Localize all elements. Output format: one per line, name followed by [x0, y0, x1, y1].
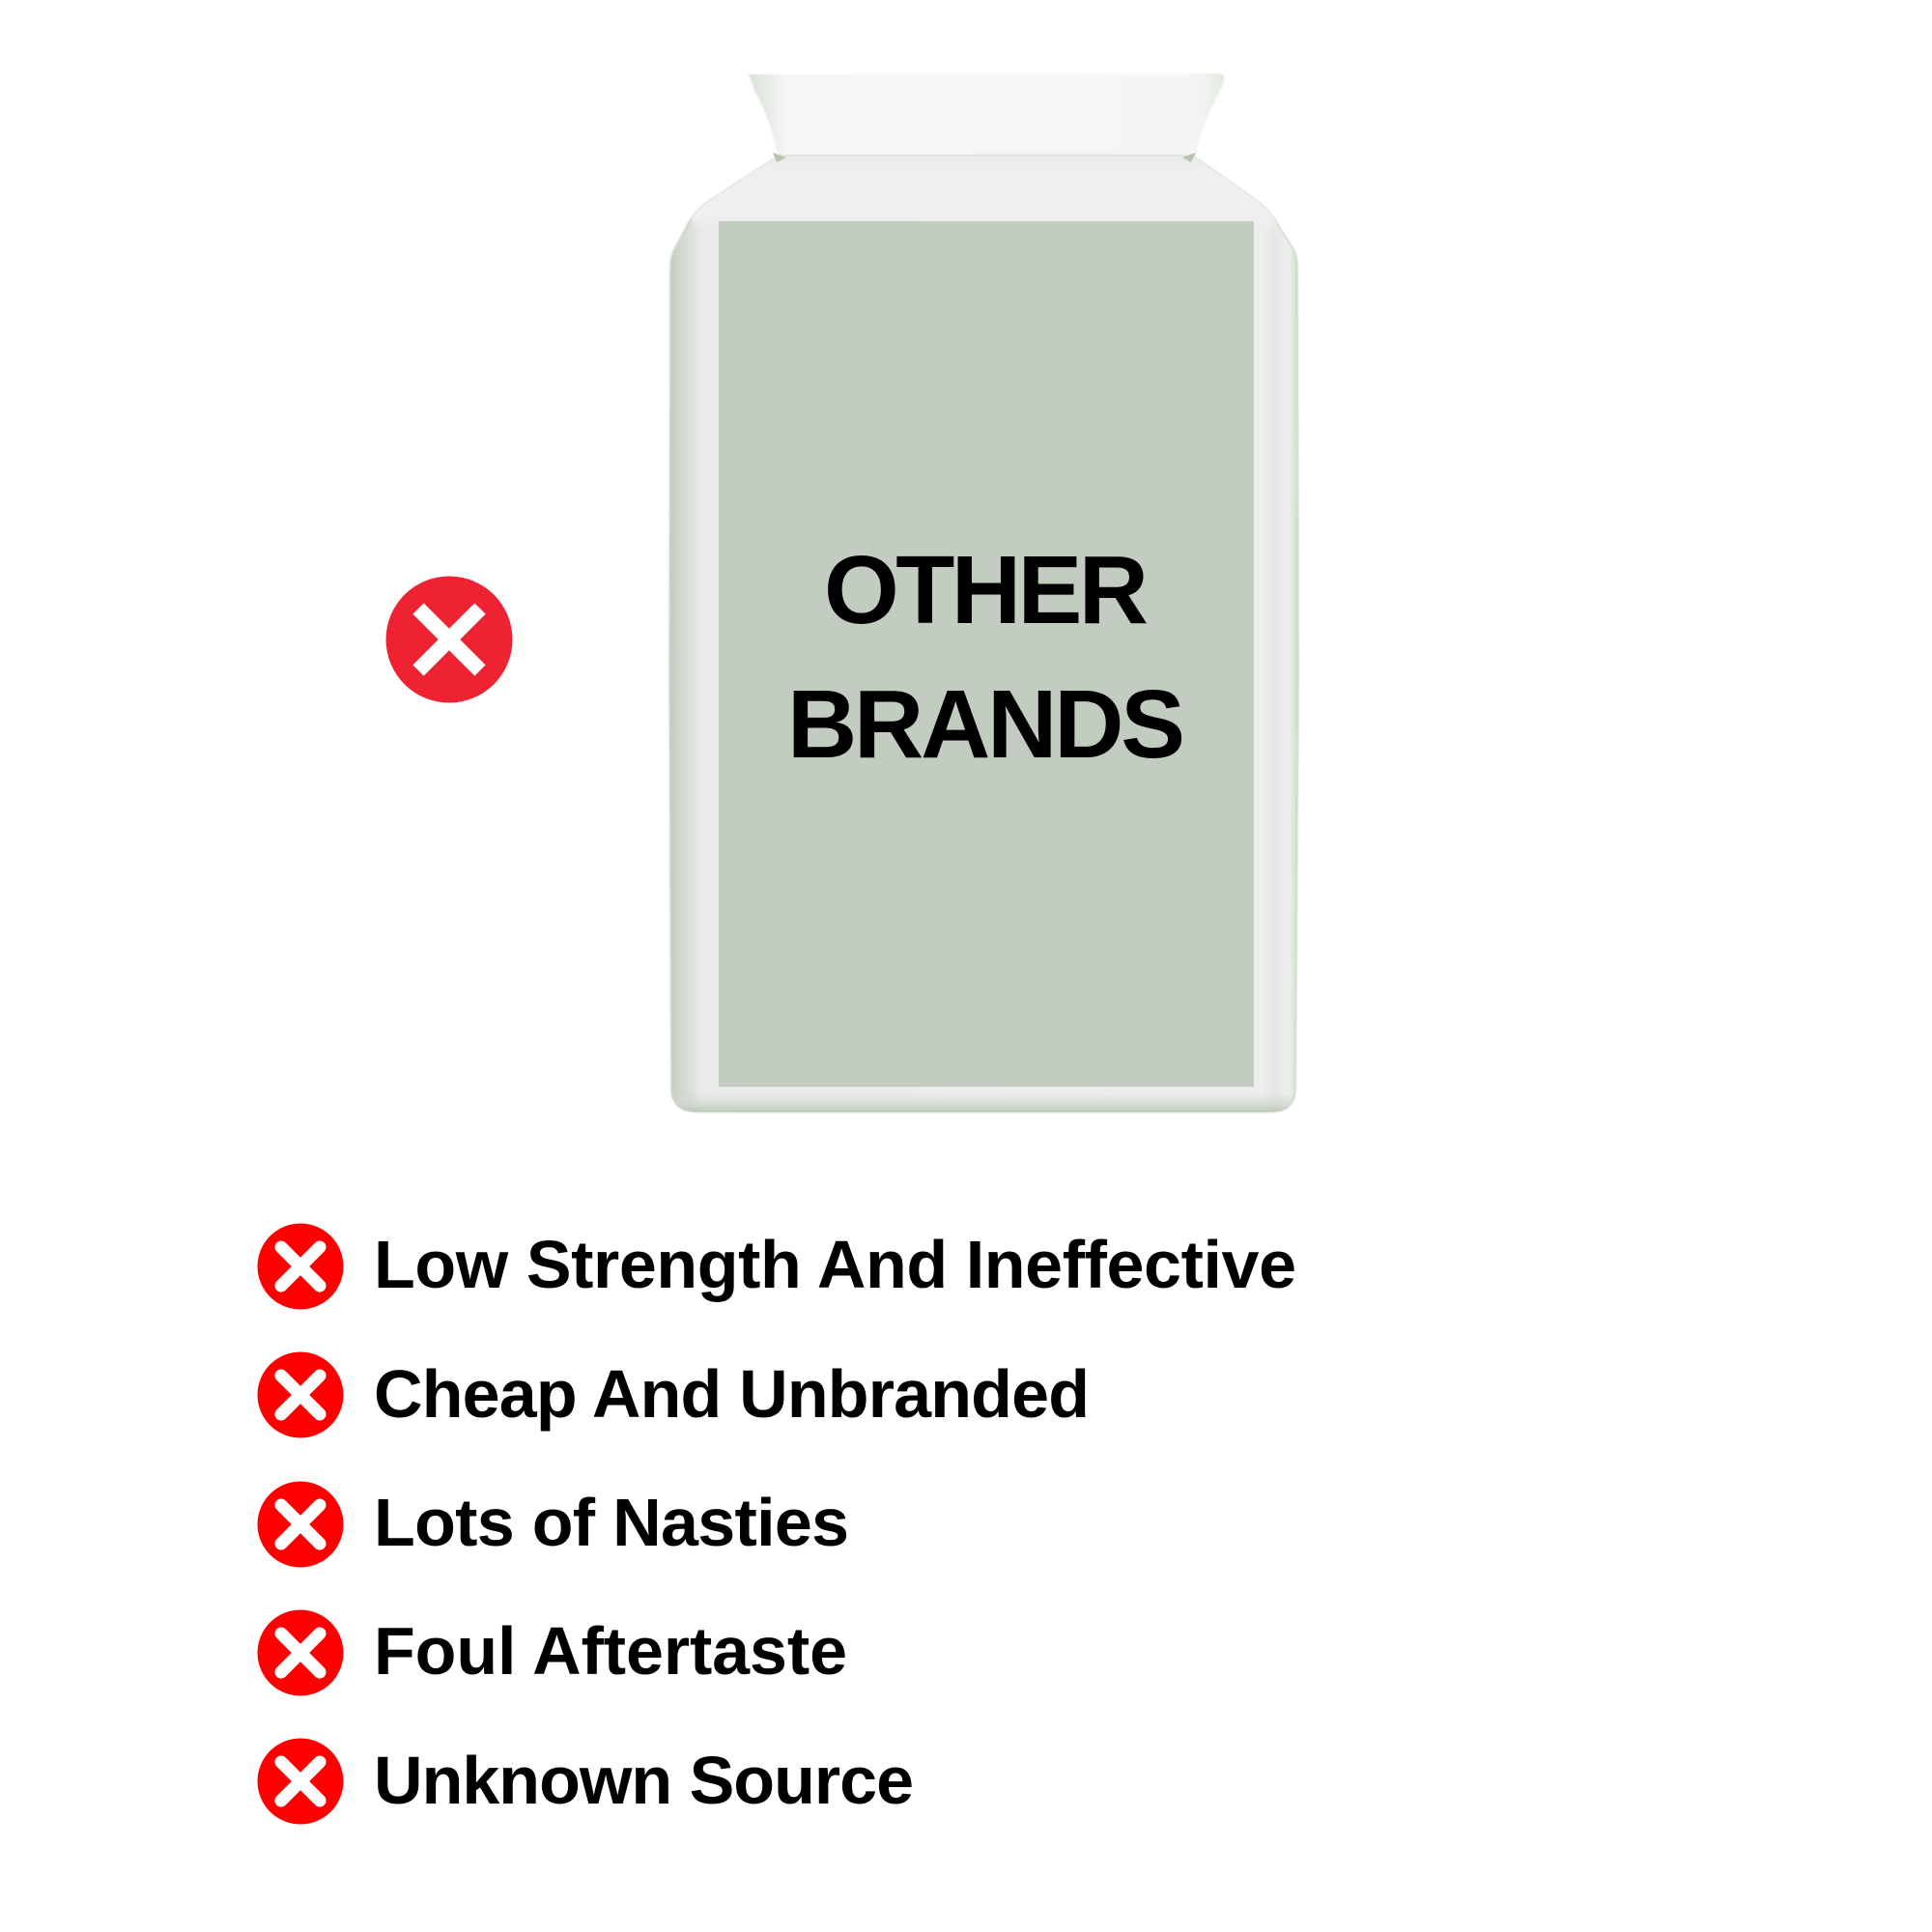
list item: cheap: Cheap And Unbranded: [374, 1356, 1090, 1432]
bottle label panel: [719, 221, 1254, 1087]
icon: large red cross badge: [386, 576, 512, 703]
list item: unknown source: Unknown Source: [374, 1743, 914, 1818]
bottle: [669, 73, 1299, 1113]
infographic: [257, 73, 1300, 1824]
bottle neck shadow: [773, 153, 1196, 162]
bottle label text: [787, 536, 1185, 779]
list: other brands drawbacks: [257, 1223, 1296, 1824]
list item: nasties: Lots of Nasties: [374, 1485, 849, 1560]
bottle neck line: [784, 155, 1182, 156]
bottle lid: [749, 73, 1224, 155]
list item: low strength: Low Strength And Ineffective: [374, 1227, 1296, 1302]
bottle label text: OTHER: [824, 536, 1149, 644]
list item: aftertaste: Foul Aftertaste: [374, 1613, 847, 1689]
bottle label text: BRANDS: [787, 670, 1185, 779]
bottle body: [669, 155, 1299, 1113]
